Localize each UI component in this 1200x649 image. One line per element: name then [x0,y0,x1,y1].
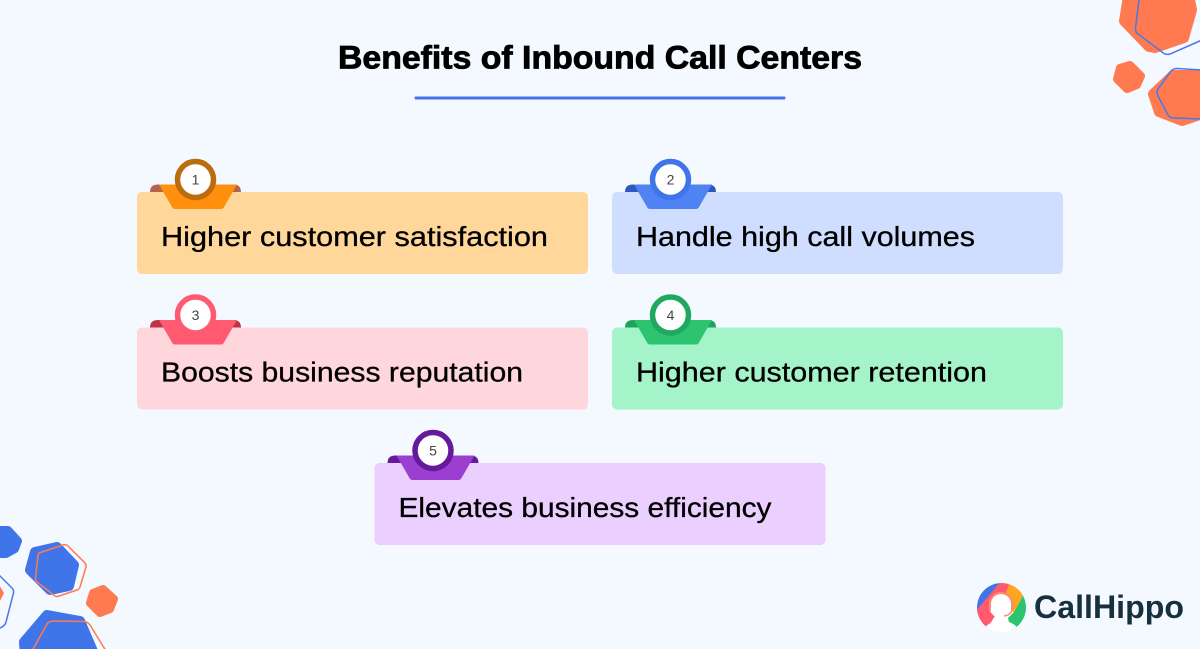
badge 2: 2 [667,172,675,188]
label 5: Elevates business efficiency [398,492,772,523]
badge 5: 5 [429,442,437,458]
panel: card 3 Boosts business reputation [137,297,588,410]
panel: card 2 Handle high call volumes [612,162,1063,274]
logo wordmark: CallHippo [1034,589,1184,625]
decoration: top-right hexagons [1117,0,1200,121]
label 1: Higher customer satisfaction [161,221,548,252]
icon: logo mark [977,583,1026,632]
badge 5 [388,432,478,480]
title underline [414,96,786,100]
decoration: bottom-left hexagons [0,530,114,649]
badge 3 [150,297,241,344]
badge 4 [625,297,716,344]
title: Benefits of Inbound Call Centers [338,39,862,75]
badge 1: 1 [192,172,200,188]
panel: card 5 Elevates business efficiency [374,432,826,545]
panel: card 4 Higher customer retention [612,297,1063,410]
badge 2 [625,162,716,209]
label 4: Higher customer retention [636,356,987,388]
badge 4: 4 [667,307,675,323]
label 2: Handle high call volumes [636,221,975,252]
badge 1 [150,162,241,209]
panel: card 1 Higher customer satisfaction [137,162,588,274]
label 3: Boosts business reputation [161,356,523,388]
logo: CallHippo [977,583,1183,632]
badge 3: 3 [192,307,200,323]
